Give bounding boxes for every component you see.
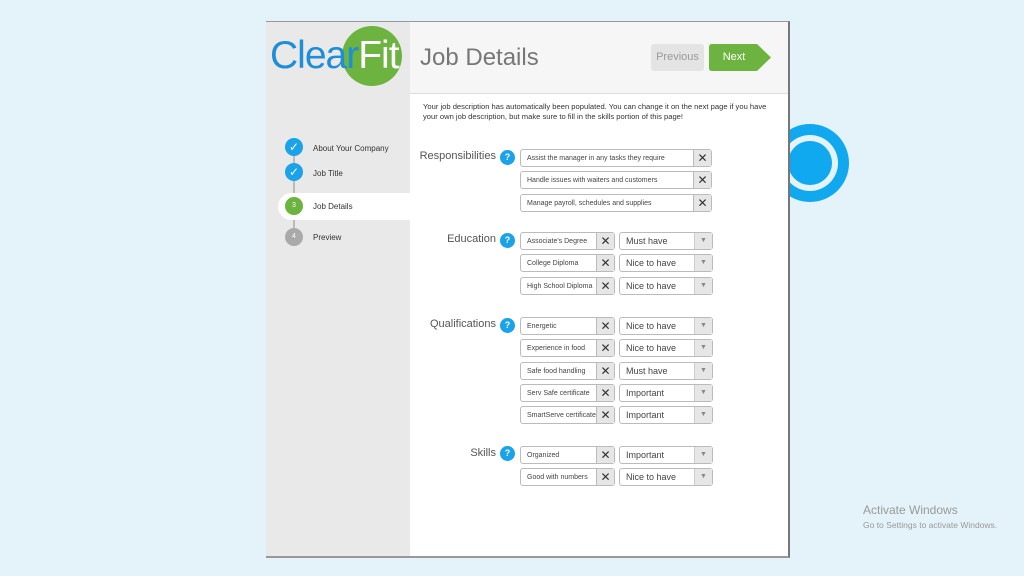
section: responsibilities: ✕ <box>697 196 708 210</box>
button: next <box>709 44 771 71</box>
section: skills: ▼ <box>700 451 707 458</box>
section: qualifications: Important <box>626 410 664 420</box>
watermark text: Activate Windows <box>863 503 958 517</box>
section: education: ▼ <box>700 259 707 266</box>
section: qualifications: ✕ <box>600 386 611 400</box>
section: qualifications: Energetic <box>527 323 557 330</box>
logo: ClearFit <box>270 26 402 86</box>
section: skills: Organized <box>527 452 559 459</box>
section: responsibilities: Manage payroll, schedules and supplies <box>527 200 652 207</box>
watermark text: Go to Settings to activate Windows. <box>863 520 997 530</box>
text: ✓ <box>289 165 299 179</box>
section: qualifications: ? <box>505 320 510 330</box>
section: skills <box>470 446 713 486</box>
section: skills: ✕ <box>600 470 611 484</box>
section: education: Education <box>447 233 496 245</box>
section: qualifications: Qualifications <box>430 318 496 330</box>
text: 3 <box>292 202 296 209</box>
section: qualifications: Safe food handling <box>527 368 585 375</box>
section: education: High School Diploma <box>527 283 592 290</box>
section: qualifications: Important <box>626 388 664 398</box>
section: responsibilities: ✕ <box>697 151 708 165</box>
section: qualifications: Must have <box>626 366 668 376</box>
section: qualifications <box>430 317 713 424</box>
section: skills: ▼ <box>700 473 707 480</box>
text: About Your Company <box>313 144 389 153</box>
section: qualifications: SmartServe certificate <box>527 412 596 419</box>
section: skills: ✕ <box>600 448 611 462</box>
section: responsibilities: Handle issues with waiters and customers <box>527 177 657 184</box>
section: qualifications: ▼ <box>700 344 707 351</box>
section: responsibilities <box>420 149 712 212</box>
panel: main app window <box>266 21 790 558</box>
section: education: ✕ <box>600 256 611 270</box>
text: Job Details <box>313 202 353 211</box>
section: skills: Important <box>626 450 664 460</box>
sidebar <box>266 22 410 556</box>
watermark text <box>863 503 997 530</box>
section: skills: Skills <box>470 447 496 459</box>
text: Job Title <box>313 169 343 178</box>
section: responsibilities: Responsibilities <box>420 150 496 162</box>
section: responsibilities: ✕ <box>697 173 708 187</box>
section: education <box>447 232 713 295</box>
section: qualifications: ▼ <box>700 322 707 329</box>
sidebar steps <box>278 156 410 228</box>
text: ✓ <box>289 140 299 154</box>
section: education: ▼ <box>700 237 707 244</box>
header bar <box>410 22 788 94</box>
button: previous: Previous <box>656 51 699 63</box>
section: education: ✕ <box>600 279 611 293</box>
section: skills: ? <box>505 448 510 458</box>
section: qualifications: ✕ <box>600 408 611 422</box>
section: education: Nice to have <box>626 281 676 291</box>
decorative ring icon <box>771 124 849 202</box>
section: responsibilities: Assist the manager in any tasks they require <box>527 155 665 162</box>
section: education: College Diploma <box>527 260 578 267</box>
section: qualifications: ✕ <box>600 319 611 333</box>
logo: ClearFit: ClearFit <box>270 34 399 77</box>
section: responsibilities: ? <box>505 152 510 162</box>
section: qualifications: Experience in food <box>527 345 585 352</box>
section: qualifications: ▼ <box>700 389 707 396</box>
text: Preview <box>313 233 341 242</box>
section: education: ? <box>505 235 510 245</box>
button: next: Next <box>723 51 745 63</box>
section: qualifications: Nice to have <box>626 343 676 353</box>
section: education: ✕ <box>600 234 611 248</box>
section: qualifications: ✕ <box>600 364 611 378</box>
section: qualifications: Serv Safe certificate <box>527 390 590 397</box>
section: education: Must have <box>626 236 668 246</box>
button: previous <box>651 44 704 71</box>
section: skills: Good with numbers <box>527 474 588 481</box>
section: qualifications: Nice to have <box>626 321 676 331</box>
section: education: ▼ <box>700 282 707 289</box>
text: 4 <box>292 233 296 240</box>
section: qualifications: ▼ <box>700 411 707 418</box>
intro text: Your job description has automatically been populated. You can change it on the next page if you have your own job description, but make sure to fill in the skills portion of this page! <box>423 102 766 121</box>
section: qualifications: ✕ <box>600 341 611 355</box>
section: skills: Nice to have <box>626 472 676 482</box>
section: qualifications: ▼ <box>700 367 707 374</box>
section: education: Nice to have <box>626 258 676 268</box>
title: Job Details <box>420 44 539 71</box>
section: education: Associate's Degree <box>527 238 587 245</box>
